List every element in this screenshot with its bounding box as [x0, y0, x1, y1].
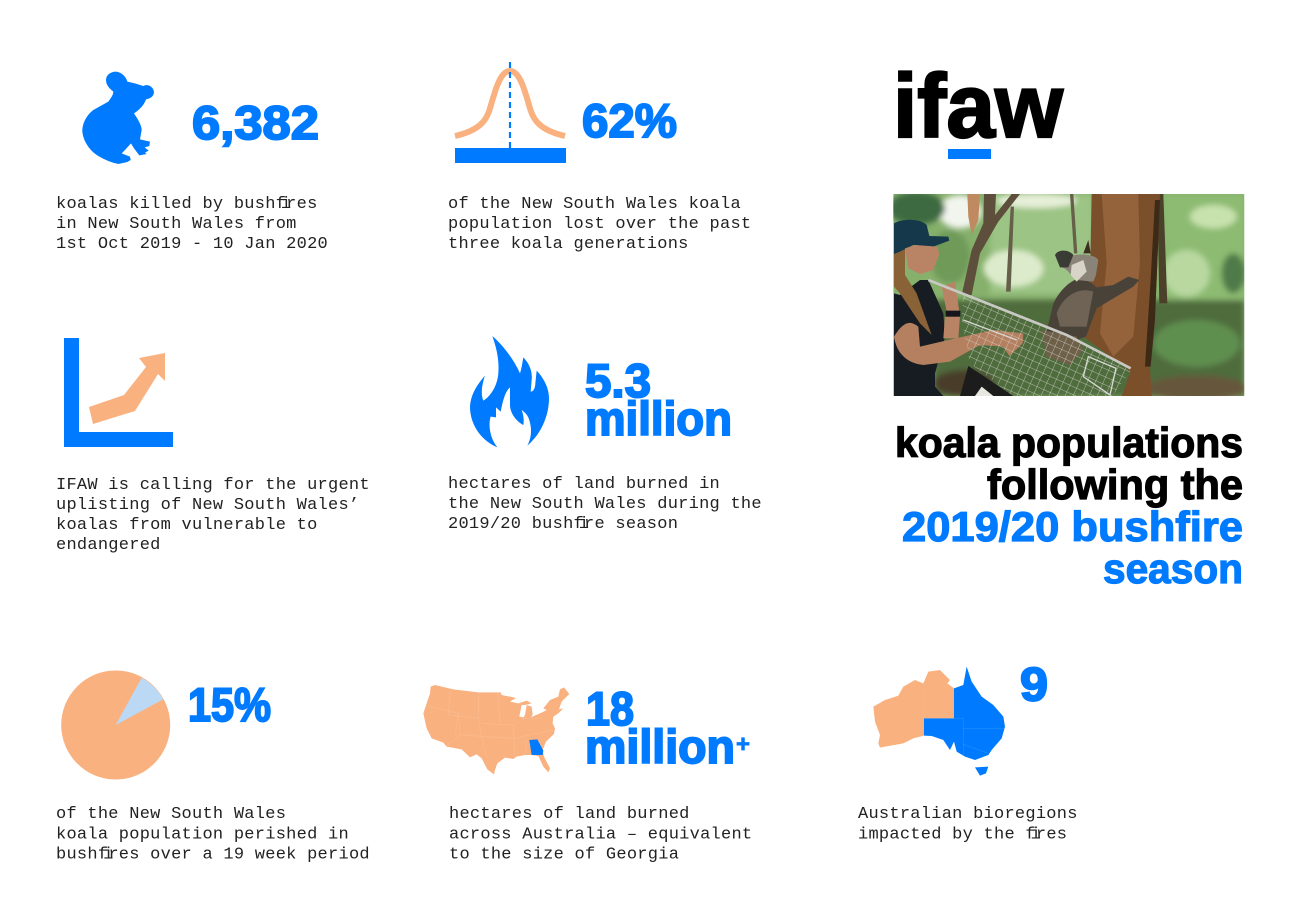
title: season — [1103, 545, 1243, 592]
stat: 62%: 62% — [582, 94, 677, 147]
map: USA with Georgia highlighted — [423, 685, 569, 774]
text: population lost: three koala generations — [448, 235, 689, 254]
stat: 9: 9 — [1020, 658, 1048, 710]
text: hectares Australia: across Australia – equivalent — [449, 826, 752, 844]
wire cage — [928, 280, 1132, 397]
title: following the — [987, 461, 1243, 508]
text: population lost: of the New South Wales koala — [448, 195, 741, 214]
text: population lost: population lost over the past — [448, 215, 751, 234]
text: koalas killed: 1st Oct 2019 - 10 Jan 2020 — [56, 235, 328, 254]
text: koalas killed: in New South Wales from — [56, 215, 297, 234]
stat: 18 million+: 18 — [586, 682, 634, 735]
title — [895, 419, 1243, 592]
text: hectares burned NSW: the New South Wales during the — [448, 495, 762, 514]
icon: growth chart arrow — [64, 338, 173, 447]
text: hectares Australia: to the size of Georgia — [449, 846, 679, 864]
text: hectares burned NSW: 2019/20 bushfire season — [448, 515, 678, 534]
text: hectares Australia: hectares of land burned — [449, 805, 690, 824]
stat: 18 million+: million — [585, 720, 735, 773]
text: uplisting call: uplisting of New South Wales’ — [56, 496, 359, 515]
title: koala populations — [895, 419, 1243, 466]
stat: 18 million+: + — [736, 731, 750, 758]
text: uplisting call: koalas from vulnerable to — [56, 516, 318, 535]
chart: pie 15% — [61, 670, 170, 780]
text: uplisting call: IFAW is calling for the urgent — [56, 476, 370, 495]
stat: 5.3 million: million — [585, 392, 732, 445]
title: 2019/20 bushfire — [902, 503, 1243, 550]
stat: 5.3 million: 5.3 — [585, 354, 651, 407]
logo: ifaw: ifaw — [893, 57, 1064, 157]
photo: woman and koala on tree — [888, 192, 1247, 401]
stat: 5.3 million — [585, 354, 732, 445]
text: perished: koala population perished in — [56, 826, 349, 844]
text: perished: of the New South Wales — [56, 805, 286, 824]
map: Australia bioregions — [873, 667, 1005, 776]
text: koalas killed: koalas killed by bushfires — [56, 195, 318, 214]
stat: 18 million+ — [585, 682, 750, 773]
icon: bell curve — [455, 62, 566, 163]
icon: koala silhouette — [82, 72, 154, 164]
text: hectares burned NSW: hectares of land burned in — [448, 475, 720, 494]
text: bioregions: Australian bioregions — [858, 805, 1078, 824]
text: bioregions: impacted by the fires — [858, 826, 1067, 844]
text: uplisting call: endangered — [56, 536, 161, 555]
stat: 6,382: 6,382 — [192, 96, 319, 149]
text: perished: bushfires over a 19 week period — [56, 846, 370, 864]
stat: 15%: 15% — [188, 678, 271, 731]
icon: flame — [470, 336, 549, 447]
